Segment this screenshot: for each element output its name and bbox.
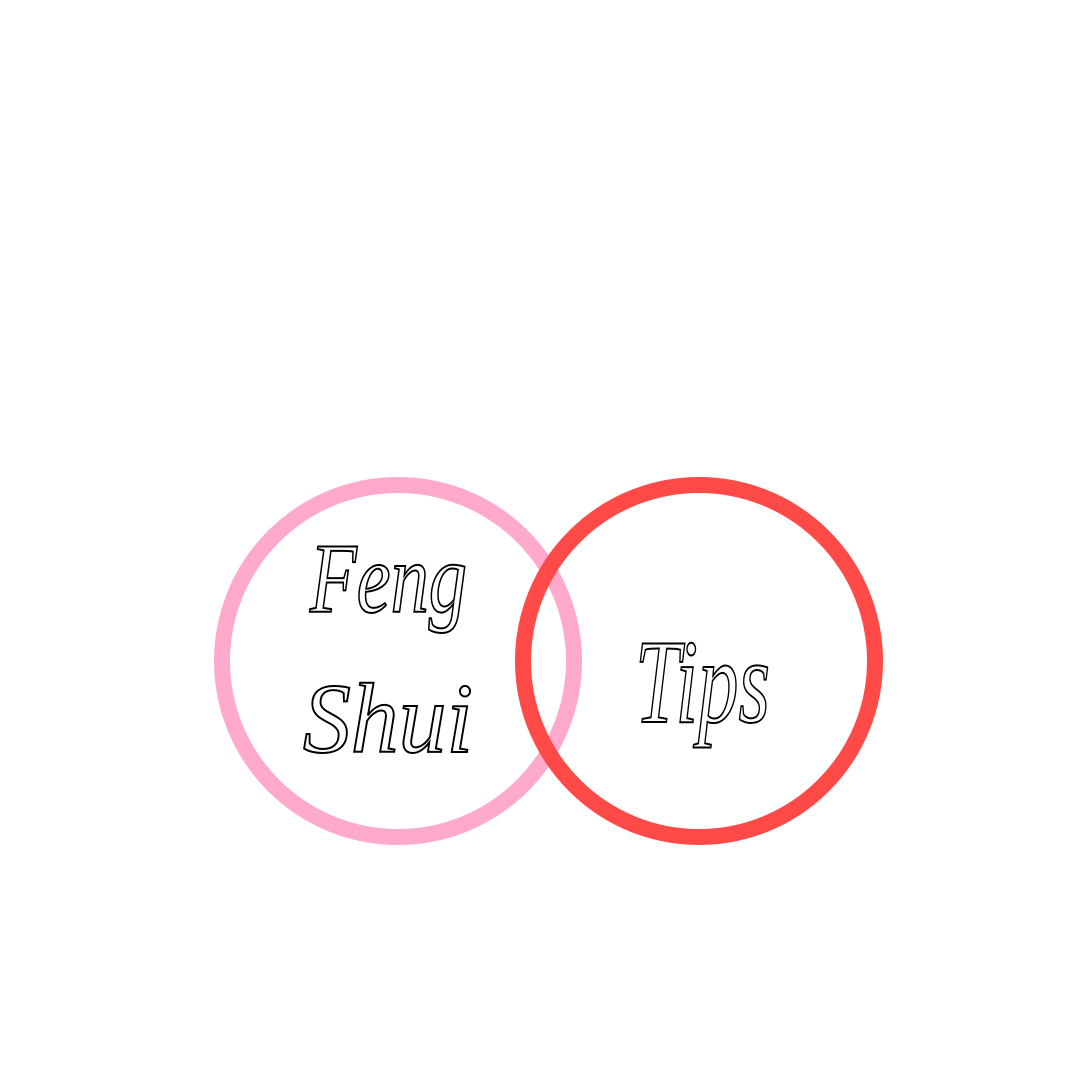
text: Feng Shui: Feng (309, 523, 467, 634)
text: Feng Shui: Shui (303, 663, 473, 774)
pink circle (222, 485, 574, 837)
red circle (523, 485, 875, 837)
text: Tips: Tips (635, 615, 770, 748)
text: Feng Shui (303, 523, 473, 774)
